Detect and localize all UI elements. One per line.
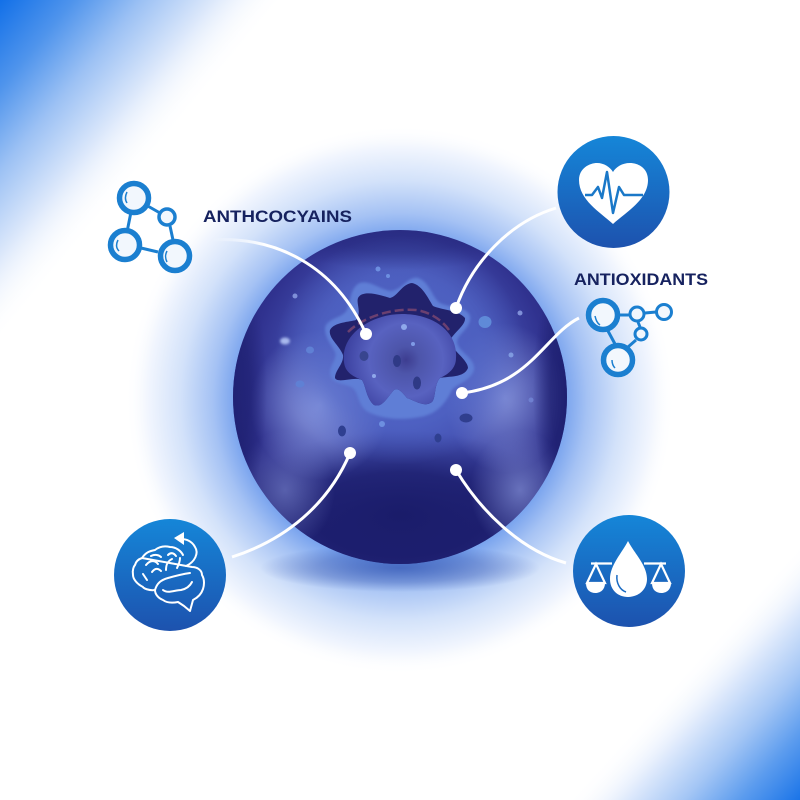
crater rim bbox=[325, 278, 474, 419]
icon: heart bbox=[558, 136, 670, 248]
blueberry bbox=[233, 230, 567, 590]
water droplets bbox=[280, 266, 534, 442]
icon: molecule left bbox=[110, 184, 190, 270]
connector: brain bbox=[232, 447, 356, 557]
central blue glow bbox=[125, 125, 675, 675]
crater opening bbox=[330, 283, 468, 406]
label: antioxidants: ANTIOXIDANTS bbox=[574, 270, 708, 289]
connector: antioxidants bbox=[456, 318, 579, 399]
berry ground shadow bbox=[260, 544, 540, 592]
reddish pulp ring bbox=[348, 310, 449, 332]
icon: molecule right bbox=[588, 300, 672, 374]
crater inner flesh bbox=[344, 314, 456, 406]
label: anthocyanins: ANTHCOCYAINS bbox=[203, 207, 352, 226]
icon: water drop and scales bbox=[573, 515, 685, 627]
berry body bbox=[233, 230, 567, 564]
connector: balance bbox=[450, 464, 566, 563]
icon: brain bbox=[114, 519, 226, 631]
connector: heart bbox=[450, 208, 556, 314]
berry shading bbox=[233, 230, 567, 564]
connector: anthocyanins bbox=[212, 240, 372, 340]
